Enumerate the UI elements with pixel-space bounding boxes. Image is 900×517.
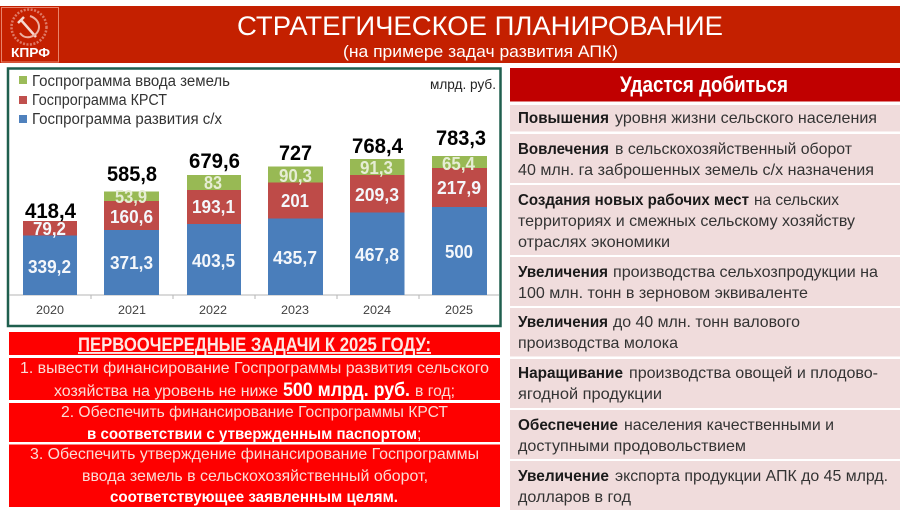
bar: 2021: 585,8 <box>107 162 157 186</box>
icon: KPRF logo: КПРФ <box>11 45 50 60</box>
task 3 <box>9 444 500 507</box>
result: vegetables and fruit: Наращивание <box>518 365 623 382</box>
bar: 2020: 418,4 <box>25 199 76 223</box>
result: milk: до 40 млн. тонн валового <box>613 314 800 331</box>
bar: 2021: 160,6 <box>110 207 153 227</box>
task 2: 2. Обеспечить финансирование Госпрограммы КРСТ <box>61 404 448 421</box>
result: living standards <box>510 105 900 132</box>
result: agricultural output <box>510 257 900 306</box>
bar: 2025 <box>432 126 487 317</box>
result: abandoned land: Вовлечения <box>518 141 609 158</box>
bar: 2024: 2024 <box>363 305 392 317</box>
bar: 2024: 768,4 <box>352 134 403 158</box>
icon: KPRF logo <box>2 8 58 62</box>
heading: priority tasks: ПЕРВООЧЕРЕДНЫЕ ЗАДАЧИ К 2025 ГОДУ: <box>78 335 431 356</box>
result: exports <box>510 461 900 510</box>
result: abandoned land: 40 млн. га заброшенных земель с/х назначения <box>518 162 874 179</box>
chart legend: Госпрограмма КРСТ <box>32 92 167 109</box>
bar: 2020: 339,2 <box>28 257 71 277</box>
bar: 2021: 371,3 <box>110 253 153 273</box>
bar: 2020 <box>23 199 77 317</box>
panel: chart <box>8 68 500 326</box>
bar: 2020: 2020 <box>36 305 64 317</box>
task 2: ; <box>417 426 421 443</box>
result: food supply <box>510 410 900 459</box>
task 1: 1. вывести финансирование Госпрограммы развития сельского <box>20 360 489 377</box>
bar: 2021: 2021 <box>118 305 146 317</box>
result: exports: экспорта продукции АПК до 45 млрд. <box>615 468 888 485</box>
result: food supply: населения качественными и <box>624 417 834 434</box>
result: milk <box>510 308 900 356</box>
bar: 2022: 679,6 <box>189 149 240 173</box>
chart legend: Госпрограмма ввода земель <box>32 73 230 90</box>
result: new jobs: Создания новых рабочих мест <box>518 192 749 209</box>
bar: 2023: 90,3 <box>279 166 312 186</box>
chart axis <box>10 295 499 299</box>
result: exports: Увеличение <box>518 468 609 485</box>
bar: 2024: 209,3 <box>355 185 399 205</box>
panel: priority tasks <box>9 332 500 507</box>
task 3: 3. Обеспечить утверждение финансирование Госпрограммы <box>30 446 479 463</box>
bar: 2021: 53,9 <box>115 187 147 207</box>
bar: 2025: 65,4 <box>442 154 475 174</box>
result: agricultural output: 100 млн. тонн в зерновом эквиваленте <box>518 285 808 302</box>
bar: 2023: 2023 <box>281 305 309 317</box>
bar: 2022: 403,5 <box>192 251 235 271</box>
result: abandoned land <box>510 134 900 183</box>
bar: 2023: 727 <box>279 141 312 165</box>
bar: 2022: 2022 <box>199 305 227 317</box>
result: food supply: Обеспечение <box>518 417 618 434</box>
bar: 2025: 217,9 <box>437 178 481 198</box>
panel: expected results <box>510 68 900 510</box>
result: milk: производства молока <box>518 335 678 352</box>
chart legend <box>19 73 230 128</box>
task 1 <box>9 358 500 401</box>
bar: 2025: 783,3 <box>436 126 486 150</box>
result: milk: Увеличения <box>518 314 608 331</box>
bar: 2022 <box>187 149 241 317</box>
bar: 2024: 467,8 <box>355 245 399 265</box>
result: abandoned land: в сельскохозяйственный оборот <box>615 141 853 158</box>
bar: 2022: 193,1 <box>192 197 235 217</box>
result: new jobs: на сельских <box>754 192 839 209</box>
bar: 2025: 2025 <box>445 305 473 317</box>
bar: 2023 <box>268 141 323 317</box>
subtitle: (на примере задач развития АПК) <box>343 42 618 61</box>
result: agricultural output: производства сельхозпродукции на <box>613 264 878 281</box>
task 2: в соответствии с утвержденным паспортом <box>87 426 417 443</box>
result: vegetables and fruit: производства овощей и плодово- <box>629 365 878 382</box>
task 3: соответствующее заявленным целям. <box>110 489 398 506</box>
bar: 2025: 500 <box>445 242 473 262</box>
bar: 2022: 83 <box>204 173 222 193</box>
task 1: 500 млрд. руб. <box>283 380 410 401</box>
bar: 2023: 201 <box>281 191 309 211</box>
bar: 2020: 79,2 <box>33 219 66 239</box>
task 1: хозяйства на уровень не ниже <box>54 383 278 400</box>
result: new jobs: территориях и смежных сельскому хозяйству <box>518 213 855 230</box>
bar: 2023: 435,7 <box>273 248 317 268</box>
result: new jobs <box>510 185 900 255</box>
task 1: в год; <box>415 383 455 400</box>
result: living standards: Повышения <box>518 110 609 127</box>
result: food supply: доступными продовольствием <box>518 438 746 455</box>
result: exports: долларов в год <box>518 489 632 506</box>
result: living standards: уровня жизни сельского населения <box>615 110 877 127</box>
heading: expected results <box>510 68 900 102</box>
task 2 <box>9 403 500 443</box>
bar: 2024 <box>350 134 404 317</box>
bar: 2024: 91,3 <box>360 158 393 178</box>
chart legend: Госпрограмма развития с/х <box>32 111 222 128</box>
result: vegetables and fruit: ягодной продукции <box>518 386 662 403</box>
heading: expected results: Удастся добиться <box>620 72 788 97</box>
result: new jobs: отраслях экономики <box>518 234 670 251</box>
unit label: млрд. руб. <box>430 77 496 92</box>
bar: 2021 <box>104 162 159 317</box>
result: vegetables and fruit <box>510 359 900 408</box>
result: agricultural output: Увеличения <box>518 264 608 281</box>
header banner <box>0 6 900 63</box>
title: СТРАТЕГИЧЕСКОЕ ПЛАНИРОВАНИЕ <box>237 11 723 41</box>
task 3: ввода земель в сельскохозяйственный оборот, <box>82 468 428 485</box>
